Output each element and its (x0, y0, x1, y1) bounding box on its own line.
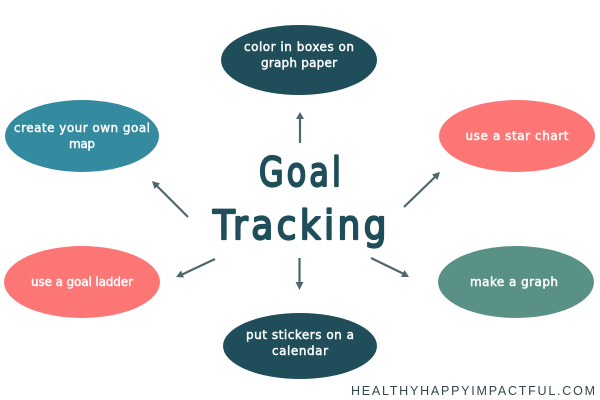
node: color in boxes on graph paper: color in boxes on (244, 40, 354, 54)
arrow: up (296, 112, 304, 143)
title (212, 150, 390, 249)
website credit: HEALTHYHAPPYIMPACTFUL.COM (351, 384, 595, 398)
node: color in boxes on graph paper: graph paper (261, 56, 337, 70)
node: color in boxes on graph paper (221, 25, 377, 95)
node: use a star chart: use a star chart (466, 129, 569, 143)
arrow: upper right (404, 172, 440, 207)
node: create your own goal map: create your own goal (14, 121, 150, 135)
arrow: upper left (152, 181, 188, 217)
node: make a graph (438, 246, 594, 318)
node: use a goal ladder: use a goal ladder (31, 275, 133, 289)
node: create your own goal map: map (69, 137, 95, 151)
node: use a goal ladder (4, 246, 160, 318)
node: use a star chart (439, 100, 595, 172)
node: make a graph: make a graph (470, 275, 558, 289)
title: Goal (259, 150, 344, 196)
node: create your own goal map (5, 100, 159, 172)
node: put stickers on a calendar: calendar (272, 344, 328, 358)
node: put stickers on a calendar (223, 313, 377, 379)
arrow: down (296, 258, 304, 290)
title: Tracking (212, 203, 390, 249)
node: put stickers on a calendar: put stickers on a (246, 328, 354, 342)
arrow: lower left (176, 259, 215, 278)
arrow: lower right (371, 258, 409, 277)
